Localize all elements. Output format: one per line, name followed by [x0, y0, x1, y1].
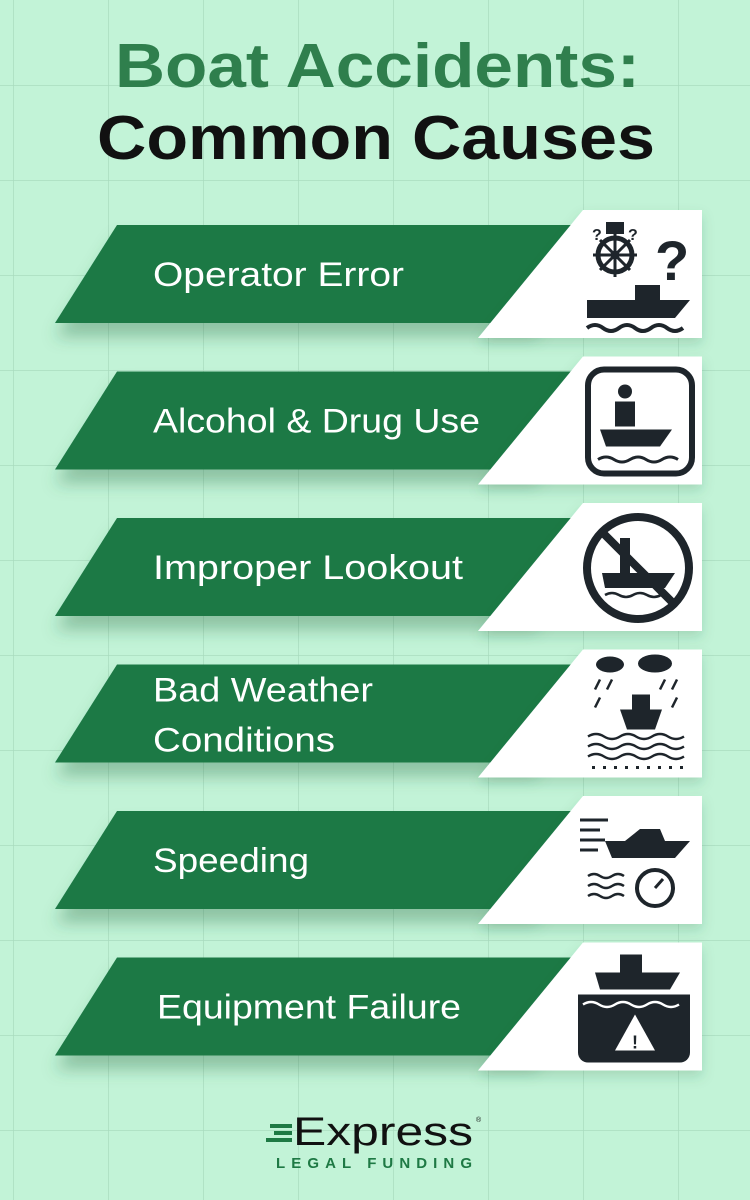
row: bad weather: Conditions — [153, 722, 335, 760]
row: operator error: Operator Error — [153, 256, 404, 294]
icon: captain wheel question: ? — [655, 229, 689, 292]
icon: speedboat gauge — [580, 820, 690, 906]
icon: boat warning — [578, 954, 690, 1062]
icon: boat warning: ! — [632, 1032, 638, 1052]
title — [97, 32, 655, 173]
row: operator error — [55, 210, 702, 338]
icon: drinking boater — [588, 370, 692, 474]
icon: storm boat — [588, 654, 688, 768]
row: alcohol — [55, 356, 702, 484]
row: bad weather: Bad Weather — [153, 672, 373, 710]
logo: ® — [476, 1116, 482, 1124]
title: Common Causes — [97, 104, 655, 173]
icon: captain wheel question: ? — [628, 227, 638, 244]
logo: Express — [293, 1110, 473, 1154]
row: bad weather — [55, 650, 702, 778]
row: alcohol: Alcohol & Drug Use — [153, 402, 480, 440]
row: speeding: Speeding — [153, 842, 309, 880]
icon: no lookout — [587, 517, 689, 619]
icon: captain wheel question — [587, 222, 690, 331]
logo — [266, 1110, 482, 1172]
row: improper lookout: Improper Lookout — [153, 549, 464, 587]
row: equipment failure: Equipment Failure — [157, 988, 461, 1026]
row: speeding — [55, 796, 702, 924]
row: improper lookout — [55, 503, 702, 631]
logo: LEGAL FUNDING — [276, 1155, 472, 1172]
title: Boat Accidents: — [115, 32, 640, 101]
row: equipment failure — [55, 942, 702, 1070]
icon: captain wheel question: ? — [592, 227, 602, 244]
